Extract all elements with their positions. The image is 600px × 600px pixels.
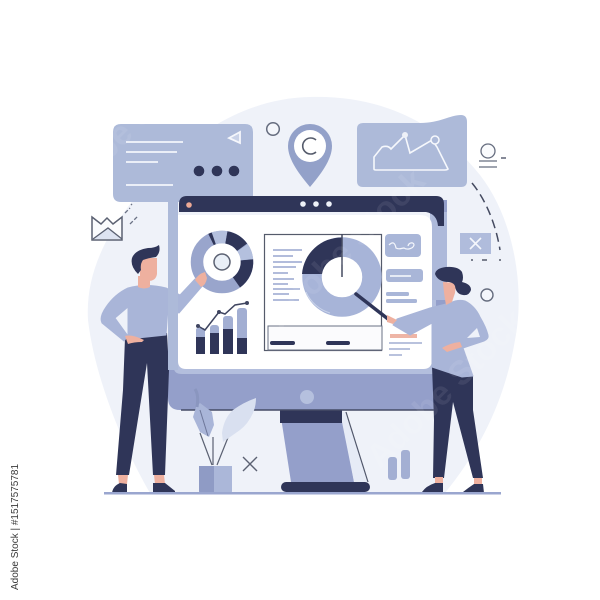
pot (199, 466, 214, 493)
icon: crown envelope (92, 204, 138, 240)
text lines (126, 142, 183, 185)
screen (178, 215, 432, 369)
icon: small circle right (481, 289, 493, 301)
icon: small circle top (267, 123, 279, 135)
leaf curl (195, 389, 198, 407)
midrib (200, 410, 208, 436)
watermark: Adobe Stock (39, 42, 213, 216)
person: left man (101, 245, 207, 493)
monitor body (168, 200, 447, 410)
chart: left donut (187, 227, 257, 297)
trousers (116, 333, 169, 475)
side tiles (385, 234, 423, 355)
three dots (194, 166, 239, 176)
torso and arms (101, 279, 204, 341)
stems (200, 425, 233, 465)
window dots (300, 201, 332, 207)
orange dot (186, 202, 192, 208)
trousers (432, 366, 483, 478)
watermark: Adobe Stock (259, 162, 433, 336)
panel: report frame (264, 234, 382, 350)
ground line (104, 492, 501, 494)
home button (300, 390, 314, 404)
monitor (168, 196, 447, 492)
stock id text: Adobe Stock | #1517575781 (10, 464, 21, 590)
hair (435, 267, 471, 295)
icon: x mark (243, 457, 257, 471)
neck and face (138, 276, 150, 288)
hand hip (125, 336, 144, 344)
chart: main donut (302, 234, 372, 313)
shoes (112, 483, 175, 493)
area chart line (374, 135, 448, 170)
hand on waist (442, 342, 462, 352)
panel: message card (113, 124, 253, 380)
waist gap (467, 328, 480, 338)
person: right woman (387, 267, 488, 493)
small bars (388, 450, 410, 480)
hand pointing (195, 272, 207, 287)
neck and face (443, 282, 456, 305)
bottom bars (270, 341, 295, 345)
plant (193, 389, 256, 493)
icon: profile (479, 144, 506, 167)
shoes (422, 483, 484, 493)
icon: x card (460, 233, 501, 260)
hair (132, 245, 160, 274)
ankles (435, 477, 482, 484)
monitor column over arm (168, 202, 178, 370)
icon: location pin (288, 124, 332, 187)
torso and arms (393, 300, 488, 377)
dashed curve (472, 183, 500, 250)
chart: bars with trend (196, 301, 249, 354)
stand (280, 411, 354, 482)
watermark: Adobe Stock (359, 302, 533, 476)
icon: triangle (229, 132, 240, 143)
watermark (39, 42, 533, 476)
top bar (179, 196, 444, 226)
right leaf (222, 398, 256, 442)
left leaf (193, 403, 214, 437)
background blob (88, 97, 519, 493)
ankles (118, 475, 165, 484)
trend line (198, 303, 247, 330)
pointing hand (387, 315, 397, 324)
panel: line chart card (357, 115, 467, 187)
pointer stick (356, 294, 388, 319)
report text lines (273, 250, 302, 300)
